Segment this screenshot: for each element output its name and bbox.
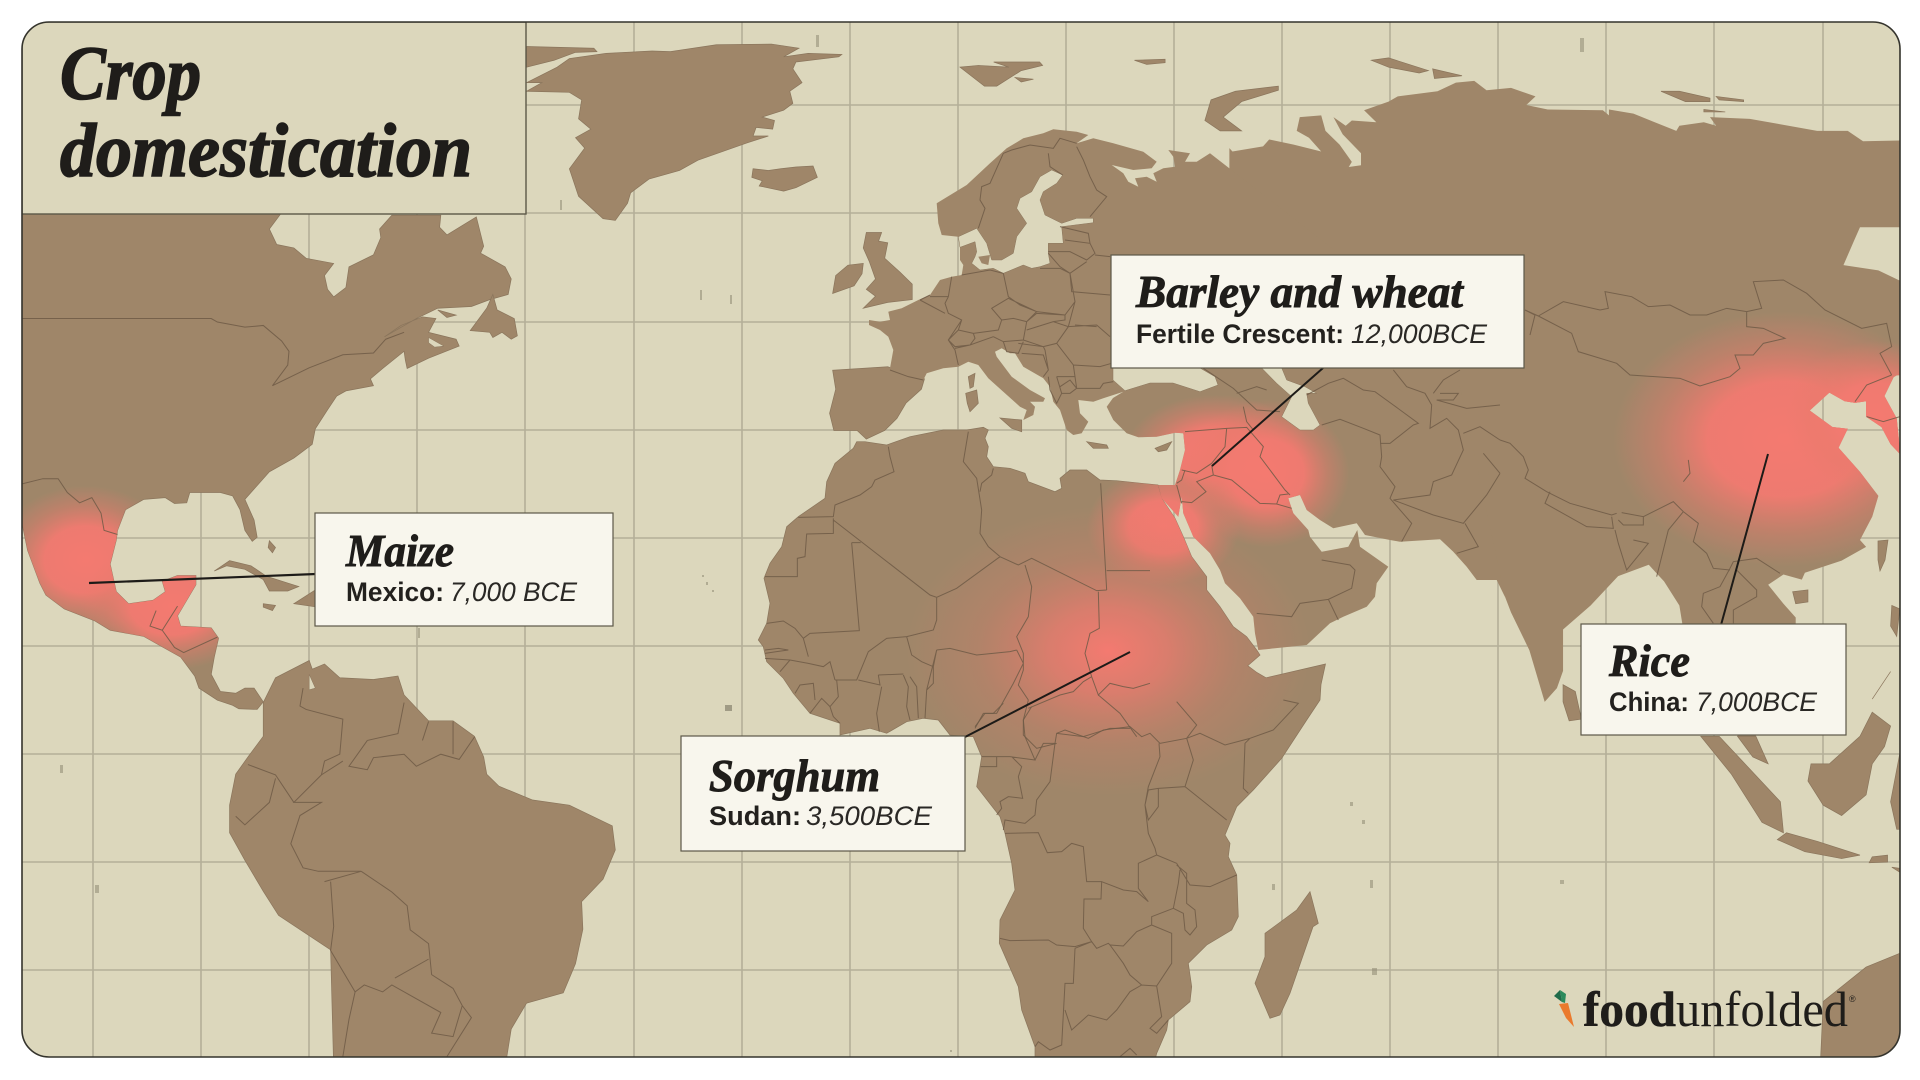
icon: carrot <box>1554 990 1574 1027</box>
callout line: Maize <box>89 574 316 583</box>
glow: China <box>1626 320 1900 558</box>
callout: Maize <box>315 513 613 626</box>
callout: Rice: China: <box>1609 687 1689 717</box>
logo: foodunfolded <box>1554 990 1856 1027</box>
glow: Sudan <box>940 531 1276 772</box>
callout: Sorghum <box>681 736 965 851</box>
land: Africa <box>758 427 1326 1060</box>
callout: Rice <box>1581 624 1846 735</box>
callout line: Sorghum <box>965 652 1130 737</box>
callout: Sorghum: 3,500BCE <box>806 801 933 831</box>
callout: Maize: 7,000 BCE <box>450 577 578 607</box>
title panel: Crop <box>60 32 201 116</box>
logo: foodunfolded: unfolded <box>1676 981 1848 1037</box>
glow: Fertile Crescent <box>1087 395 1349 585</box>
land: Madagascar <box>1255 892 1318 1018</box>
callout: Sorghum: Sudan: <box>709 801 801 831</box>
callout line: Rice <box>1721 454 1768 625</box>
logo: foodunfolded: food <box>1583 981 1676 1037</box>
title panel: domestication <box>60 109 472 193</box>
land: Europe and Middle East <box>869 129 1505 650</box>
callout: Barley and wheat: Barley and wheat <box>1135 266 1464 317</box>
heat glow: domestication regions <box>0 312 1920 796</box>
callout: Barley and wheat: 12,000BCE <box>1351 319 1488 349</box>
callout line: Barley and wheat <box>1212 368 1323 466</box>
glow group <box>0 312 1920 796</box>
callout: Maize: Maize <box>345 525 454 576</box>
callout: Maize: Mexico: <box>346 577 444 607</box>
title panel <box>22 22 526 214</box>
logo: foodunfolded: ® <box>1849 994 1856 1004</box>
callout: Rice: Rice <box>1608 635 1690 686</box>
callout: Barley and wheat <box>1111 255 1524 368</box>
land: Zealand <box>978 255 990 265</box>
glow: Mexico <box>22 491 218 664</box>
callout: Sorghum: Sorghum <box>709 750 880 801</box>
callout: Rice: 7,000BCE <box>1696 687 1818 717</box>
callout: Barley and wheat: Fertile Crescent: <box>1136 319 1344 349</box>
